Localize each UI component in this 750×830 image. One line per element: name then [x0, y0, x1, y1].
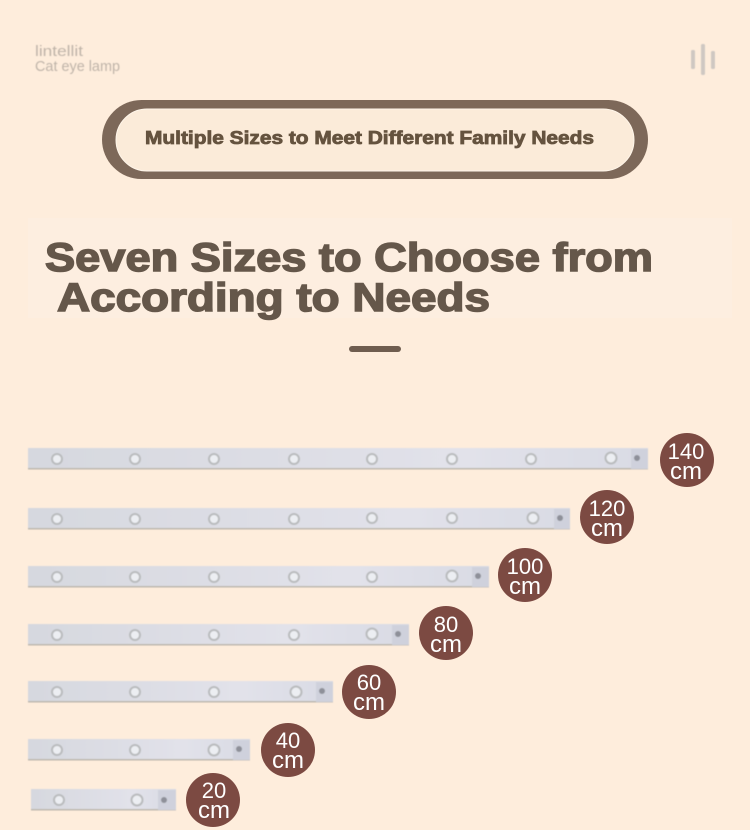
- brand text: Cat eye lamp: [35, 59, 120, 75]
- lamp bar: 80 cm: [28, 624, 409, 646]
- size badge: 120 cm: 120: [589, 496, 625, 521]
- main title: [45, 236, 653, 320]
- lamp bar: 140 cm: [28, 448, 648, 470]
- size badge: 140 cm: [660, 433, 714, 487]
- icon: sound bars: [691, 44, 715, 75]
- size badge: 40 cm: 40: [276, 728, 300, 753]
- subtitle pill: Multiple Sizes to Meet Different Family Needs: [145, 128, 594, 148]
- brand text: [35, 44, 120, 75]
- size badge: 80 cm: 80: [434, 612, 458, 637]
- size badge: 120 cm: [580, 490, 634, 544]
- size badge: 20 cm: 20: [202, 778, 226, 803]
- size badge: 100 cm: 100: [507, 554, 543, 579]
- size badge: 140 cm: cm: [670, 458, 702, 485]
- main title: Seven Sizes to Choose from: [45, 236, 653, 280]
- lamp bar: 100 cm: [28, 566, 489, 588]
- brand text: lintellit: [35, 44, 83, 60]
- title band: [28, 218, 732, 318]
- size badge: 60 cm: 60: [357, 670, 381, 695]
- lamp bar: 20 cm: [31, 789, 176, 810]
- size badge: 20 cm: [186, 773, 240, 827]
- size badge: 40 cm: cm: [272, 747, 304, 774]
- size badge: 80 cm: [419, 606, 473, 660]
- size badge: 100 cm: cm: [509, 573, 541, 600]
- lamp bar: 120 cm: [28, 508, 570, 530]
- size badge: 140 cm: 140: [668, 439, 704, 464]
- size badge: 60 cm: cm: [353, 689, 385, 716]
- size badge: 20 cm: cm: [198, 797, 230, 824]
- size badge: 100 cm: [498, 548, 552, 602]
- size badge: 60 cm: [342, 665, 396, 719]
- title divider: [349, 346, 401, 352]
- main title: According to Needs: [57, 276, 490, 320]
- lamp bar: 60 cm: [28, 681, 333, 702]
- lamp bar: 40 cm: [28, 739, 250, 760]
- size badge: 40 cm: [261, 723, 315, 777]
- size badge: 80 cm: cm: [430, 631, 462, 658]
- subtitle pill: [102, 100, 648, 179]
- size badge: 120 cm: cm: [591, 515, 623, 542]
